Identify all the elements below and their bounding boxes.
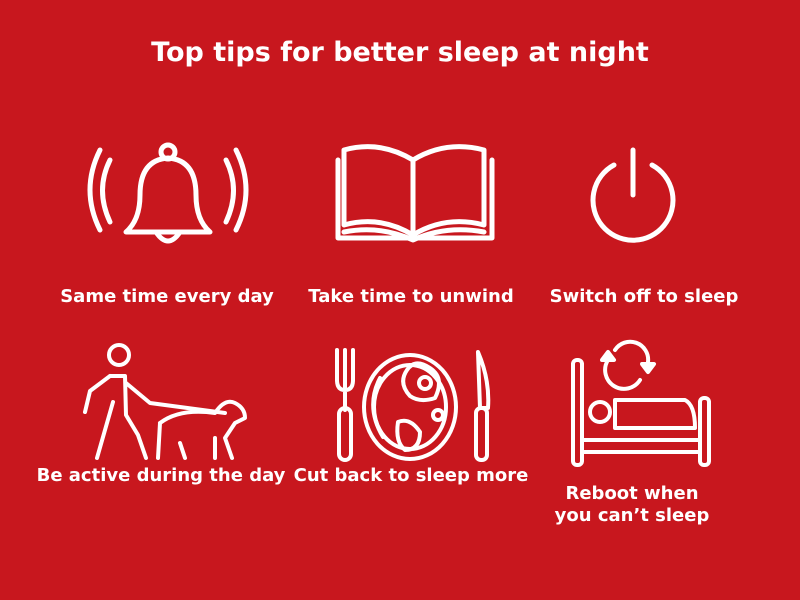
label: active: Be active during the day [37,465,285,486]
icon: power [593,150,673,240]
icon: bell [90,145,246,241]
label: cut back: Cut back to sleep more [294,465,528,486]
icon: book [338,147,492,240]
label: switch off: Switch off to sleep [550,286,738,307]
title: Top tips for better sleep at night [151,37,649,68]
label: reboot: Reboot when [565,483,699,504]
label: reboot: you can’t sleep [555,505,709,526]
label: same time: Same time every day [60,286,274,307]
icon: bed with rotate arrows [573,342,709,465]
label: unwind: Take time to unwind [308,286,514,307]
label: reboot [554,483,709,526]
icon: walker with dog [85,345,245,458]
icon: plate with cutlery [337,350,488,460]
